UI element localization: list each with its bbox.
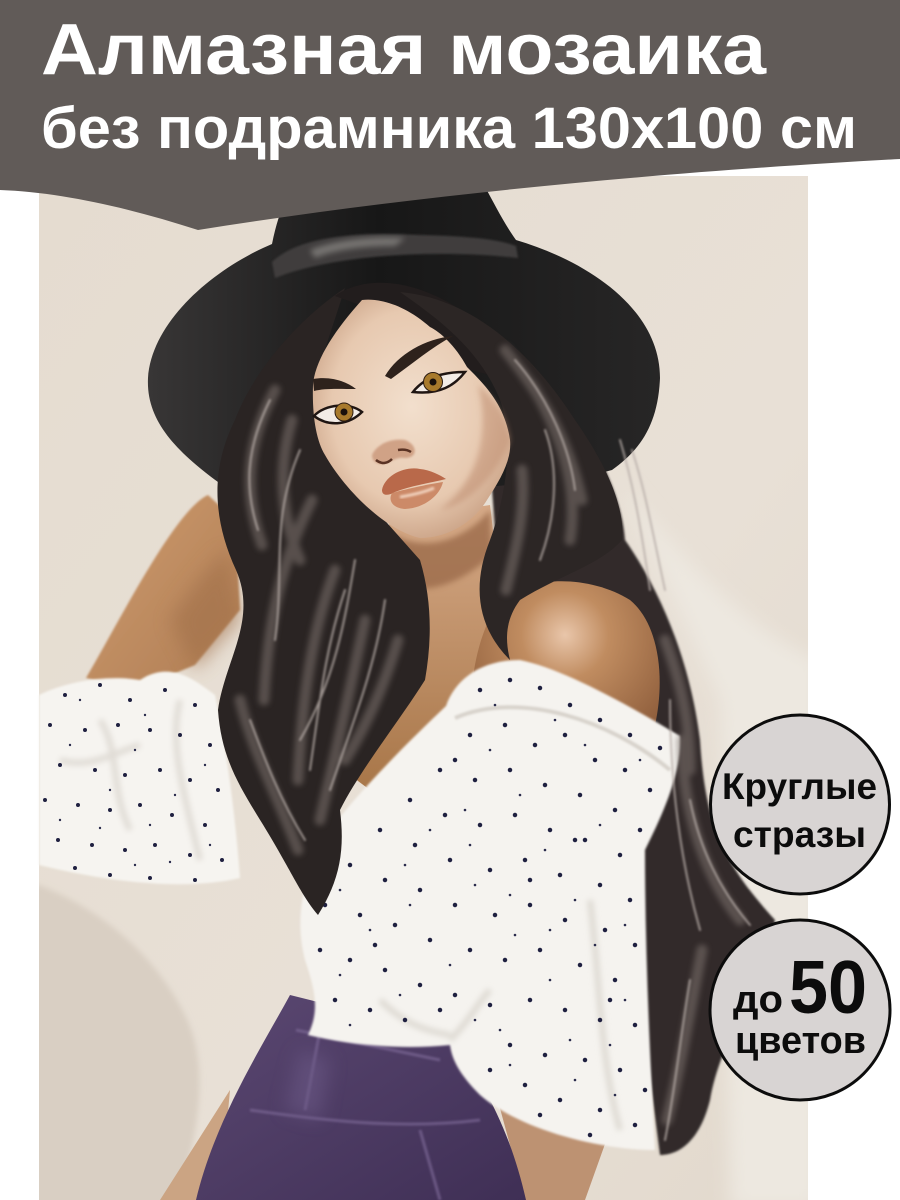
hair top parting: [335, 283, 510, 380]
nose: [372, 440, 415, 464]
thighs: [160, 1090, 610, 1200]
lips: [382, 468, 446, 509]
right eyebrow: [385, 336, 453, 379]
face: [313, 300, 510, 538]
left sleeve: [39, 672, 240, 884]
blouse dots: [320, 680, 660, 1135]
raised arm: [86, 495, 240, 690]
badge: up to 50 colours: до: [733, 979, 783, 1021]
badge: up to 50 colours: цветов: [735, 1020, 866, 1062]
badge: up to 50 colours: 50: [789, 945, 867, 1029]
right front hair: [400, 292, 622, 660]
badge: round rhinestones: [710, 715, 890, 894]
left eye: [314, 403, 362, 423]
badge: round rhinestones: Круглые: [722, 766, 877, 807]
right eye: [413, 372, 465, 393]
painting background: [20, 176, 820, 1200]
fine hair strands: [249, 360, 750, 1140]
title line 2: без подрамника 130х100 см: [41, 96, 857, 161]
badge: round rhinestones: стразы: [733, 814, 866, 855]
header banner: [0, 0, 900, 230]
back hair, right: [480, 320, 775, 1155]
white polka dot blouse: [300, 660, 680, 1150]
title line 1: Алмазная мозаика: [41, 10, 767, 90]
torso and shoulder skin: [330, 505, 660, 790]
left eyebrow: [313, 378, 356, 391]
purple shorts: [196, 995, 526, 1200]
soft hair shine: [240, 350, 740, 1120]
badge: up to 50 colours: [710, 920, 890, 1100]
hat: [148, 185, 660, 491]
front hair, left: [217, 283, 750, 1140]
